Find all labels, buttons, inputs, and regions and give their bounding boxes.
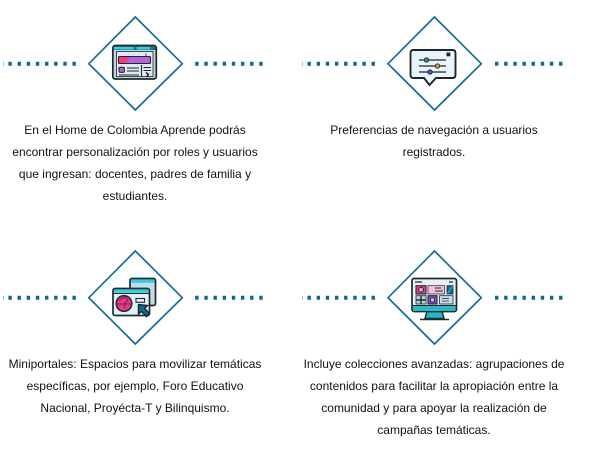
dotted line: top right, right side <box>495 62 564 66</box>
text block: bottom right: campañas temáticas. <box>377 423 491 437</box>
text block: top left <box>12 123 258 203</box>
text block: bottom right: contenidos para facilitar la apropiación entre la <box>310 379 558 393</box>
icon: desktop monitor with content blocks <box>412 278 456 320</box>
diamond: top left <box>89 17 182 110</box>
text block: bottom left: Nacional, Proyécta-T y Bilinquismo. <box>40 401 230 415</box>
dotted line: bottom right, right side <box>495 296 564 300</box>
text block: top left: encontrar personalización por roles y usuarios <box>12 145 258 159</box>
text block: bottom left <box>9 357 261 415</box>
dotted line: top left, right side <box>195 62 264 66</box>
text block: top right <box>330 123 538 159</box>
text block: top right: registrados. <box>403 145 465 159</box>
diamond: top right <box>388 17 481 110</box>
dotted line: bottom left, right side <box>195 296 264 300</box>
icon: browser windows with globe and cursor <box>113 278 156 316</box>
icon: settings speech bubble <box>410 50 456 85</box>
text block: bottom left: Miniportales: Espacios para movilizar temáticas <box>9 357 261 371</box>
icon: web page layout <box>113 46 156 79</box>
dotted line: bottom left, left side <box>3 296 77 300</box>
text block: top left: estudiantes. <box>103 189 167 203</box>
dotted line: top left, left side <box>3 62 77 66</box>
text block: bottom right: comunidad y para apoyar la realización de <box>321 401 547 415</box>
text block: bottom right: Incluye colecciones avanzadas: agrupaciones de <box>304 357 564 371</box>
text block: top left: que ingresan: docentes, padres de familia y <box>19 167 251 181</box>
text block: top right: Preferencias de navegación a usuarios <box>330 123 538 137</box>
diamond: bottom right <box>388 251 481 344</box>
dotted line: top right, left side <box>302 62 376 66</box>
text block: bottom right <box>304 357 564 437</box>
diamond: bottom left <box>89 251 182 344</box>
text block: top left: En el Home de Colombia Aprende podrás <box>24 123 246 137</box>
dotted line: bottom right, left side <box>302 296 376 300</box>
text block: bottom left: específicas, por ejemplo, Foro Educativo <box>27 379 243 393</box>
